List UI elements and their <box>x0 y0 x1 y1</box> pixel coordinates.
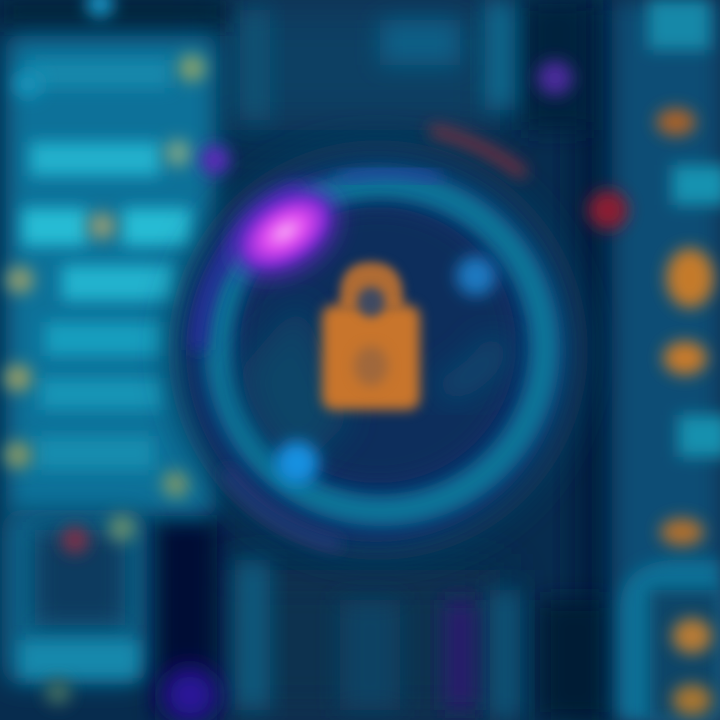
panel: right column <box>588 0 720 720</box>
panel: left data column <box>4 36 230 516</box>
icon: blue glow points <box>275 256 496 485</box>
icon: padlock <box>322 262 420 410</box>
icon: magenta glow <box>217 170 353 294</box>
panel: lower left block <box>2 510 147 705</box>
icon: security ring <box>168 130 588 560</box>
